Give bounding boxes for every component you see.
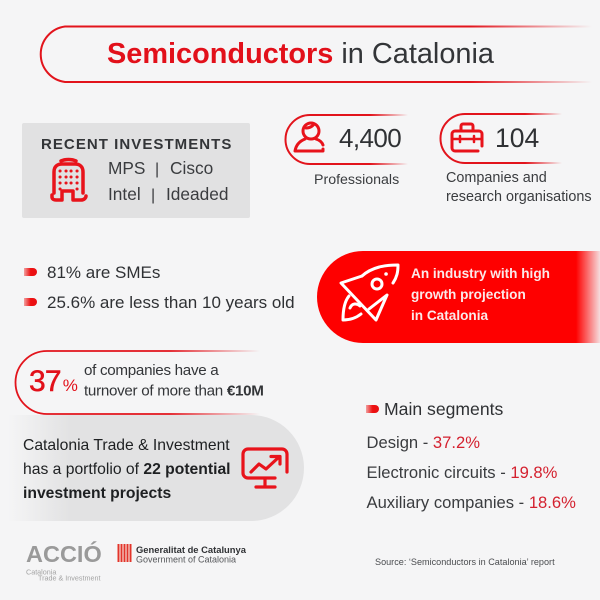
panel: recent investments <box>22 123 250 218</box>
callout text: in Catalonia <box>411 308 488 323</box>
stat: professionals <box>286 115 408 188</box>
label: professionals: Professionals <box>314 172 399 188</box>
stat: companies <box>440 114 592 205</box>
segment list <box>366 433 576 512</box>
heading: recent investments: RECENT INVESTMENTS <box>41 136 232 153</box>
icon: person <box>295 123 323 151</box>
investment names: Intel <box>108 184 141 204</box>
bullet 2 <box>24 298 37 306</box>
segment list: Electronic circuits - 19.8% <box>366 463 558 482</box>
callout: growth projection <box>317 251 600 343</box>
bullet list: company facts <box>24 263 295 312</box>
title: Semiconductors in Catalonia <box>107 38 495 70</box>
segments <box>366 399 576 512</box>
investment names: MPS <box>108 158 145 178</box>
bullet list: company facts: 81% are SMEs <box>47 263 160 282</box>
stat: turnover <box>16 351 264 414</box>
logo: Generalitat de Catalunya <box>117 544 247 564</box>
turnover text: of companies have a <box>84 362 219 379</box>
logo: ACCIÓ <box>26 540 102 582</box>
callout text: An industry with high <box>411 266 550 281</box>
logo: ACCIÓ: Trade & Investment <box>38 574 100 582</box>
flag emblem <box>117 544 132 562</box>
segment list: Auxiliary companies - 18.6% <box>366 493 576 512</box>
investment names: Cisco <box>170 158 213 178</box>
label: companies and research organisations: research organisations <box>446 189 592 205</box>
investment names: | <box>155 161 159 178</box>
number: 4,400: 4,400 <box>339 123 401 153</box>
logo: Generalitat de Catalunya: Government of Catalonia <box>136 554 236 564</box>
title pill <box>41 26 592 82</box>
panel: investment projects <box>8 415 304 521</box>
investment names <box>108 158 228 204</box>
bullet 1 <box>24 268 37 276</box>
bullet list: company facts: 25.6% are less than 10 years old <box>47 293 295 312</box>
icon: briefcase <box>452 124 482 151</box>
panel text: Catalonia Trade & Investment <box>23 437 230 454</box>
turnover text: turnover of more than €10M <box>84 382 264 400</box>
logo: Generalitat de Catalunya: Generalitat de Catalunya <box>136 544 247 555</box>
source note: Source: ‘Semiconductors in Catalonia’ report <box>375 557 555 567</box>
bullet <box>366 405 379 413</box>
investment names: | <box>151 187 155 204</box>
logo: ACCIÓ: ACCIÓ <box>26 540 102 567</box>
callout text: growth projection <box>411 287 526 302</box>
heading: main segments: Main segments <box>384 399 504 419</box>
number: 104: 104 <box>495 123 539 153</box>
icon: monitor with chart <box>243 449 287 487</box>
icon: office building <box>52 160 86 200</box>
panel text: has a portfolio of 22 potential <box>23 461 231 478</box>
segment list: Design - 37.2% <box>366 433 480 452</box>
panel text: investment projects <box>23 485 171 502</box>
number: 37%: 37% <box>29 365 78 398</box>
icon: rocket <box>341 265 398 320</box>
label: companies and research organisations: Companies and <box>446 170 547 186</box>
investment names: Ideaded <box>166 184 228 204</box>
logo: ACCIÓ: Catalonia <box>26 568 56 576</box>
